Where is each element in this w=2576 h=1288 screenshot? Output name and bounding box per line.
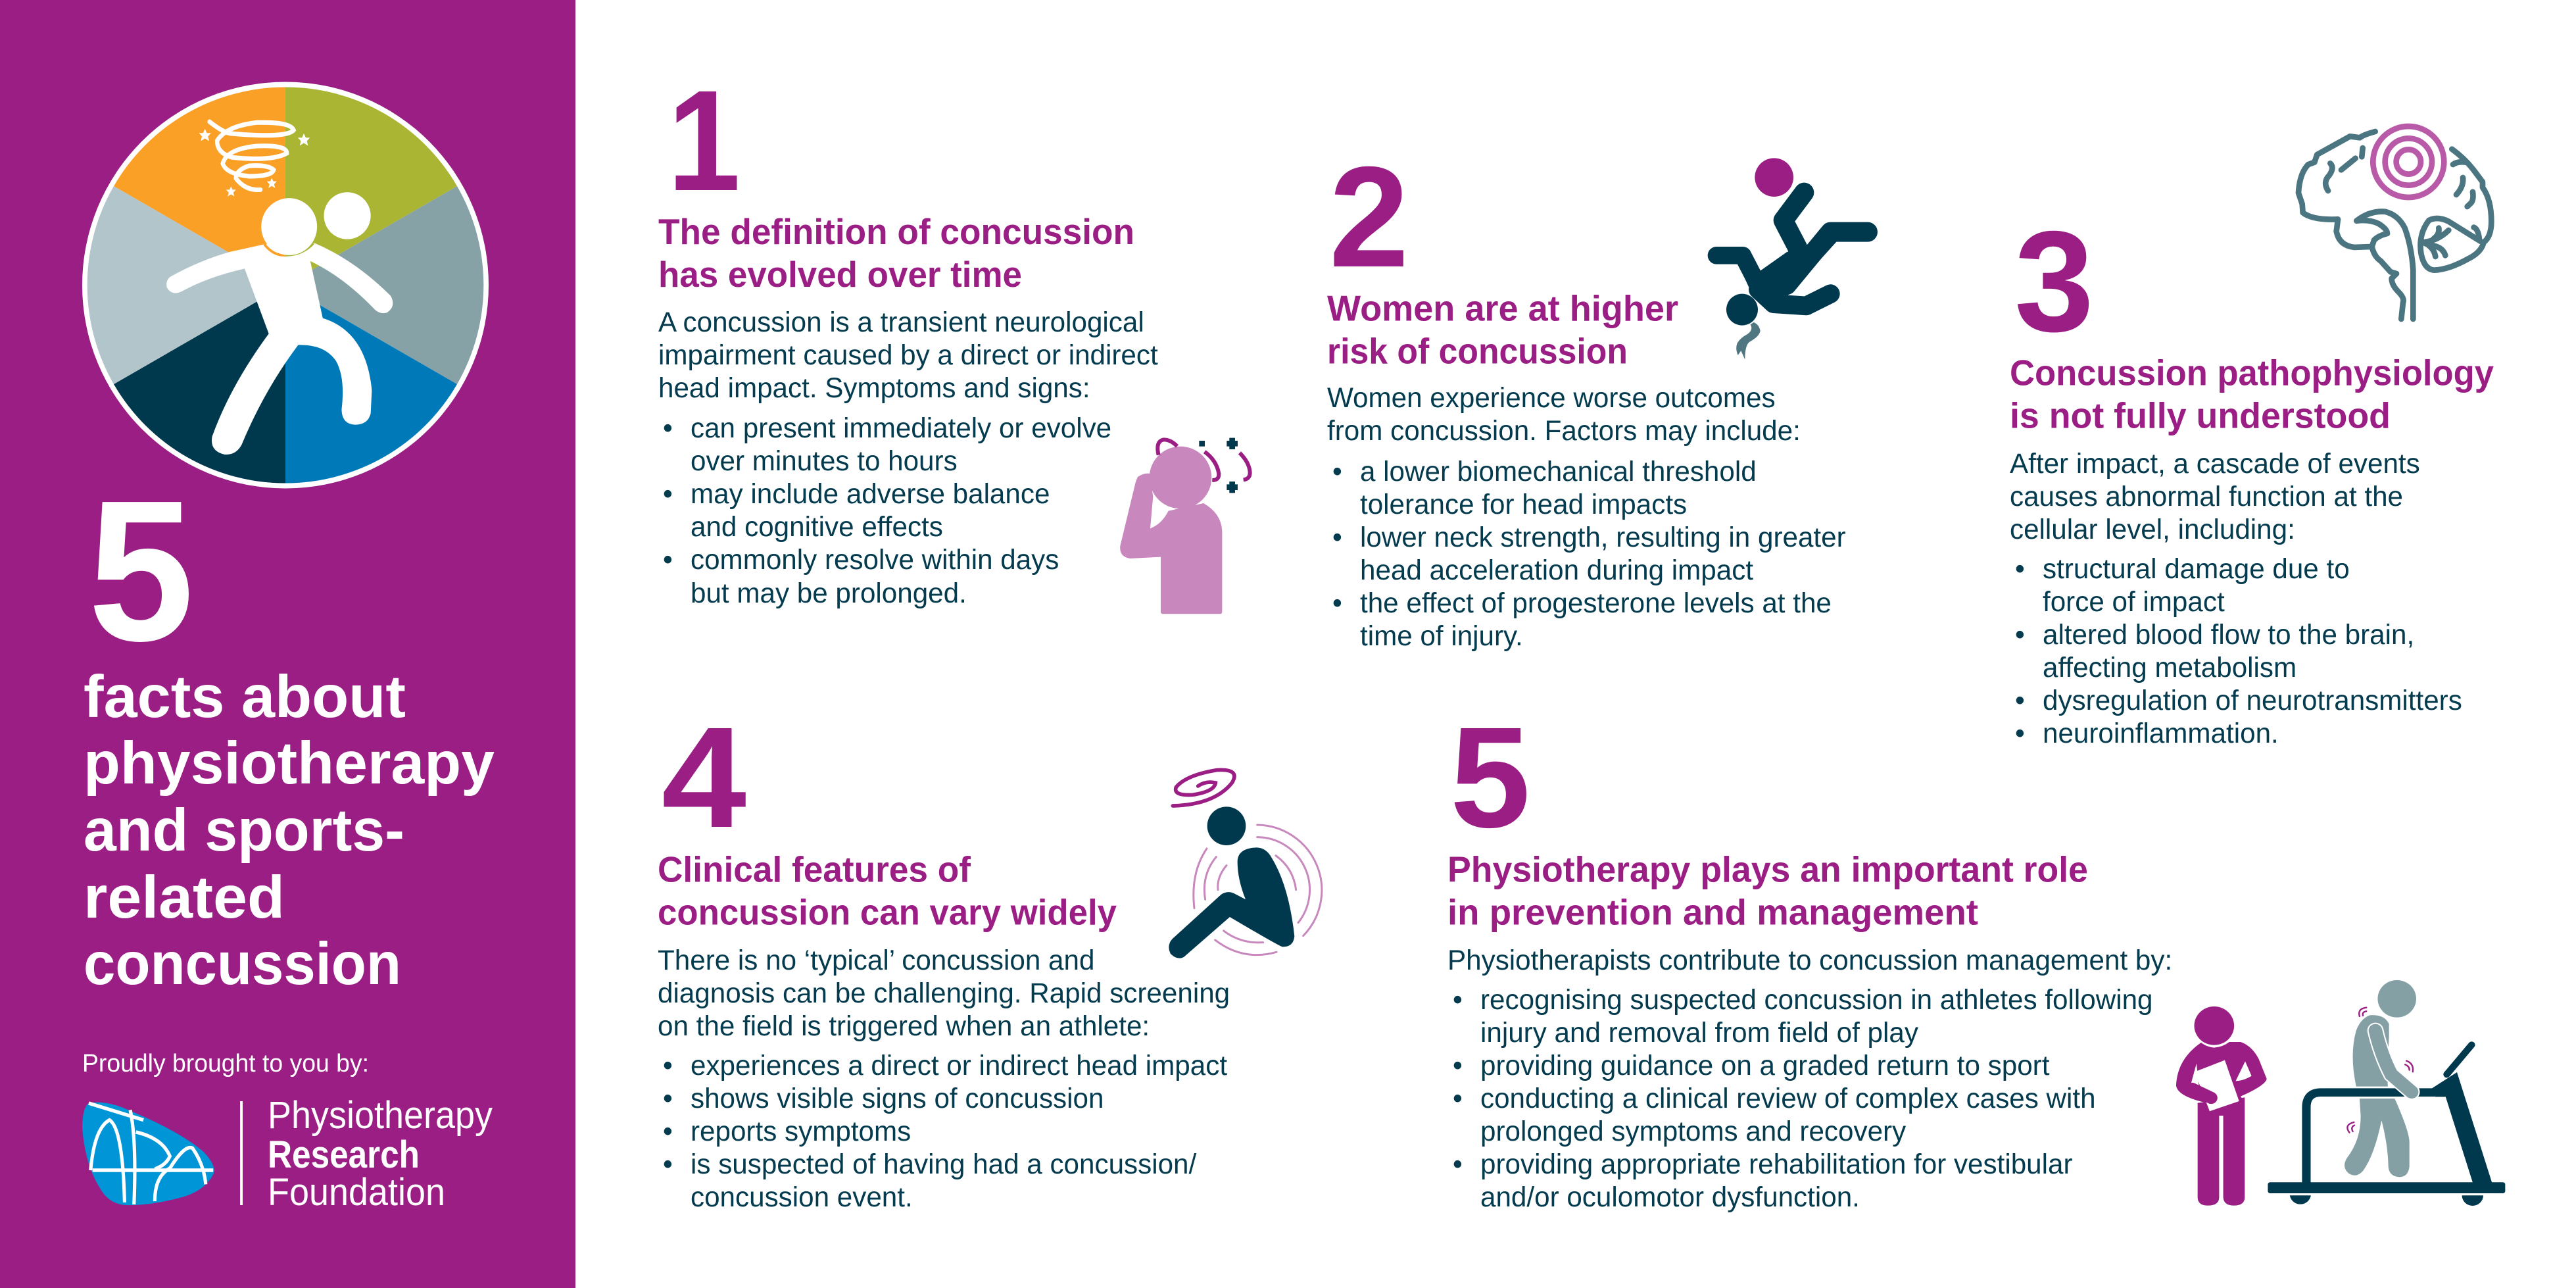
heading 2 — [1327, 288, 1678, 371]
body 4: experiences a direct or indirect head impact — [691, 1050, 1227, 1081]
body 1: A concussion is a transient neurological — [658, 307, 1144, 337]
body 3: • — [2015, 619, 2025, 650]
body 3: force of impact — [2043, 586, 2225, 617]
body 3: altered blood flow to the brain, — [2043, 619, 2414, 650]
heading 4: Clinical features of — [658, 849, 971, 889]
foundation name: Foundation — [268, 1171, 445, 1214]
logo: APA — [82, 1102, 214, 1205]
hero circle emblem — [82, 82, 489, 488]
body 4: There is no ‘typical’ concussion and — [658, 945, 1094, 976]
body 4: concussion event. — [691, 1181, 913, 1212]
body 3: neuroinflammation. — [2043, 718, 2279, 749]
body 5: and/or oculomotor dysfunction. — [1480, 1181, 1860, 1212]
body 4: • — [663, 1083, 673, 1114]
icon: falling player — [1716, 158, 1868, 360]
body 1: • — [663, 412, 673, 443]
body 4: is suspected of having had a concussion/ — [691, 1149, 1197, 1179]
heading 3 — [2010, 353, 2494, 435]
body 2: • — [1332, 587, 1342, 618]
heading 3: Concussion pathophysiology — [2010, 353, 2494, 393]
heading 1: The definition of concussion — [658, 211, 1134, 252]
body 5: providing appropriate rehabilitation for vestibular — [1480, 1149, 2073, 1179]
body 5: • — [1453, 984, 1463, 1015]
panel title: facts about — [84, 664, 406, 730]
body 4: shows visible signs of concussion — [691, 1083, 1104, 1114]
left panel — [0, 0, 575, 1288]
body 1: head impact. Symptoms and signs: — [658, 372, 1090, 403]
body 3: • — [2015, 553, 2025, 584]
number 5: 5 — [1450, 698, 1530, 858]
heading 5: in prevention and management — [1447, 892, 1978, 933]
body 3: structural damage due to — [2043, 553, 2350, 584]
body 2: tolerance for head impacts — [1360, 489, 1687, 520]
panel title: concussion — [84, 931, 401, 997]
big number 5: 5 — [88, 458, 194, 683]
panel title: and sports- — [84, 797, 404, 864]
heading 5: Physiotherapy plays an important role — [1447, 849, 2088, 889]
body 3: causes abnormal function at the — [2010, 481, 2403, 512]
body 1: and cognitive effects — [691, 511, 943, 542]
body 2: from concussion. Factors may include: — [1327, 415, 1801, 446]
body 5: prolonged symptoms and recovery — [1480, 1116, 1907, 1147]
body 5: conducting a clinical review of complex cases with — [1480, 1083, 2096, 1114]
body 4: reports symptoms — [691, 1116, 911, 1147]
body 4 — [658, 945, 1230, 1212]
body 1: may include adverse balance — [691, 478, 1050, 509]
body 1: impairment caused by a direct or indirect — [658, 339, 1158, 370]
foundation name: Physiotherapy — [268, 1094, 493, 1137]
icon: brain with target — [2298, 126, 2491, 319]
body 4: • — [663, 1050, 673, 1081]
body 2: the effect of progesterone levels at the — [1360, 587, 1832, 618]
heading 1 — [658, 211, 1134, 295]
number 4: 4 — [662, 698, 746, 858]
fact 2 — [1327, 137, 1868, 651]
logo divider — [240, 1101, 243, 1205]
fact 5 — [1447, 698, 2505, 1212]
heading 1: has evolved over time — [658, 254, 1022, 295]
heading 2: risk of concussion — [1327, 330, 1628, 371]
body 3: cellular level, including: — [2010, 514, 2295, 545]
body 5: recognising suspected concussion in athletes following — [1480, 984, 2153, 1015]
panel title: physiotherapy — [84, 730, 495, 797]
heading 2: Women are at higher — [1327, 288, 1678, 329]
icon: dizzy seated person — [1169, 770, 1322, 958]
body 5: • — [1453, 1149, 1463, 1179]
panel title: related — [84, 864, 285, 931]
patient on treadmill — [2268, 980, 2505, 1206]
body 3: After impact, a cascade of events — [2010, 448, 2420, 479]
icon: person holding head — [1120, 438, 1250, 614]
body 2: • — [1332, 522, 1342, 553]
body 2: a lower biomechanical threshold — [1360, 456, 1757, 487]
number 1: 1 — [668, 61, 741, 221]
number 2: 2 — [1329, 137, 1409, 297]
body 2: Women experience worse outcomes — [1327, 382, 1776, 413]
body 5: providing guidance on a graded return to sport — [1480, 1050, 2050, 1081]
foundation name: Research — [268, 1133, 420, 1176]
body 2 — [1327, 382, 1846, 651]
body 5 — [1447, 945, 2172, 1212]
body 2: • — [1332, 456, 1342, 487]
body 3: • — [2015, 685, 2025, 716]
body 1: • — [663, 544, 673, 575]
body 1: over minutes to hours — [691, 445, 958, 476]
fact 4 — [658, 698, 1322, 1212]
body 5: • — [1453, 1083, 1463, 1114]
body 1: • — [663, 478, 673, 509]
body 4: • — [663, 1116, 673, 1147]
body 3 — [2010, 448, 2462, 749]
heading 5 — [1447, 849, 2088, 933]
foundation name — [268, 1094, 493, 1214]
body 3: • — [2015, 718, 2025, 749]
heading 4 — [658, 849, 1117, 933]
body 1: but may be prolonged. — [691, 578, 967, 608]
body 4: on the field is triggered when an athlete: — [658, 1010, 1150, 1041]
body 5: • — [1453, 1050, 1463, 1081]
heading 3: is not fully understood — [2010, 395, 2391, 435]
body 2: lower neck strength, resulting in greater — [1360, 522, 1846, 553]
panel title — [84, 664, 495, 997]
sponsor line: Proudly brought to you by: — [82, 1050, 369, 1077]
body 2: time of injury. — [1360, 620, 1523, 651]
icon: physiotherapist and treadmill — [2176, 980, 2505, 1206]
body 3: dysregulation of neurotransmitters — [2043, 685, 2462, 716]
physiotherapist with clipboard — [2176, 1006, 2267, 1206]
body 1: commonly resolve within days — [691, 544, 1059, 575]
body 1: can present immediately or evolve — [691, 412, 1111, 443]
fact 3 — [2010, 126, 2494, 749]
number 3: 3 — [2014, 202, 2094, 362]
body 5: Physiotherapists contribute to concussion management by: — [1447, 945, 2172, 976]
body 2: head acceleration during impact — [1360, 555, 1753, 585]
fact 1 — [658, 61, 1250, 614]
body 1 — [658, 307, 1158, 608]
heading 4: concussion can vary widely — [658, 892, 1117, 933]
body 3: affecting metabolism — [2043, 652, 2297, 683]
body 5: injury and removal from field of play — [1480, 1017, 1919, 1048]
body 4: • — [663, 1149, 673, 1179]
body 4: diagnosis can be challenging. Rapid screening — [658, 978, 1230, 1008]
